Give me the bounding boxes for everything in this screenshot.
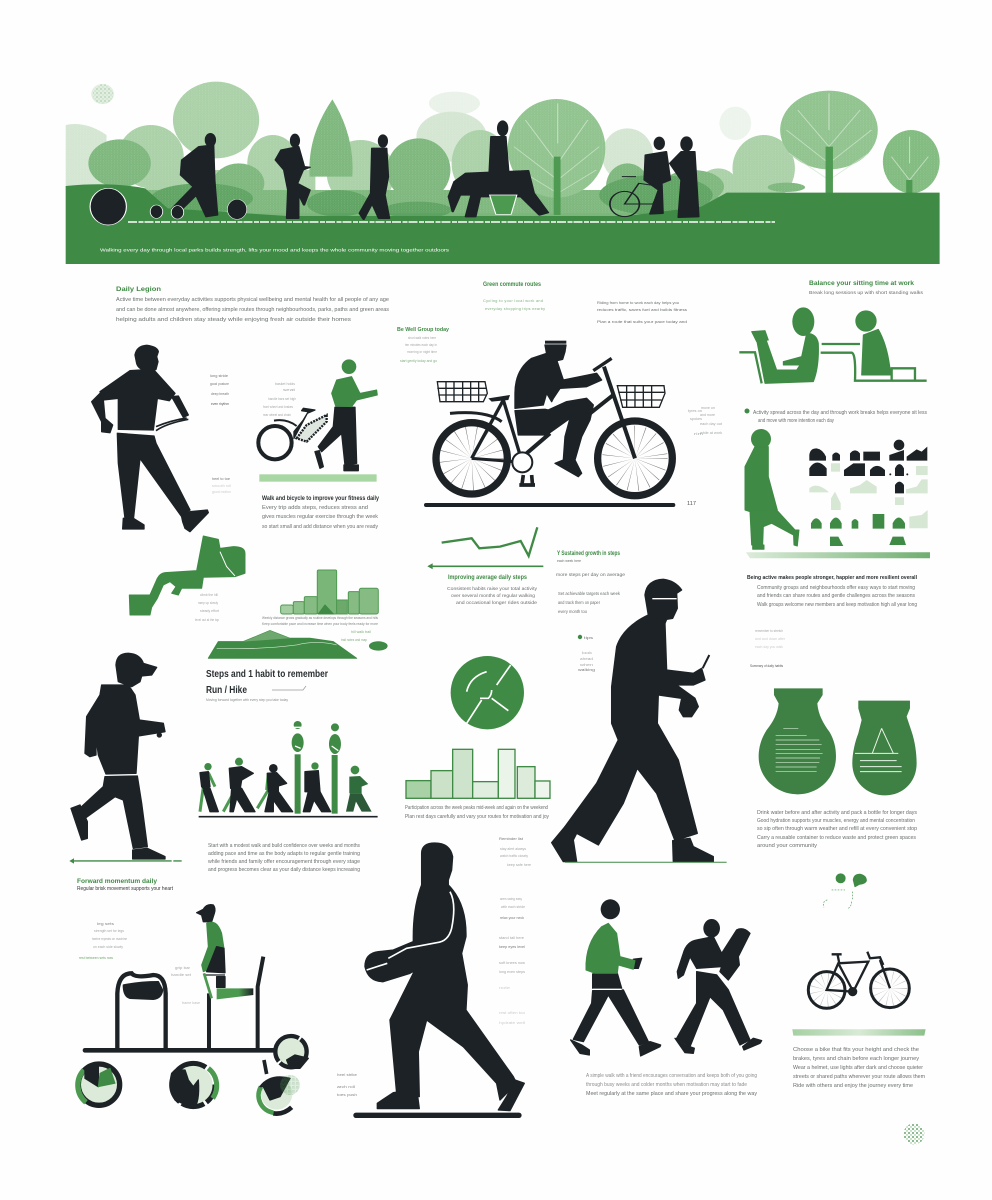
labels: tall walker notes: watch traffic closely xyxy=(500,854,528,858)
labels: small notes: Summary of daily habits xyxy=(750,664,783,668)
text block: trend side notes xyxy=(556,550,626,614)
text block: two walkers caption: Meet regularly at the same place and share your progress along the way xyxy=(586,1091,757,1097)
labels: machine notes: rest between sets now xyxy=(79,956,113,960)
labels: bars caption: trail notes and map xyxy=(341,638,367,642)
labels: walking man notes: long even steps xyxy=(499,970,525,974)
labels: small notes xyxy=(750,629,786,668)
labels: step map notes: steady effort xyxy=(200,609,220,613)
icon: speckled circle xyxy=(904,1124,924,1144)
text block: group caption: Start with a modest walk and build confidence over weeks and months xyxy=(208,843,360,849)
text block: trend side notes: each week here xyxy=(557,558,582,563)
icons: green vessels xyxy=(759,688,917,795)
text block: walker caption xyxy=(77,879,174,892)
text block: green route: Plan a route that suits your pace today and xyxy=(597,319,687,324)
labels: cyclist notes: spokes xyxy=(690,417,702,421)
text block: trend side notes: every month too xyxy=(558,609,587,614)
figure: two walkers xyxy=(571,899,762,1056)
labels: bicycle notes: basket holds xyxy=(275,382,295,386)
heading: group progress: Run / Hike xyxy=(206,685,247,696)
text block: green route: Riding from home to work each day helps you xyxy=(597,300,679,305)
labels: bars caption: Keep comfortable pace and increase time when your body feels ready for more xyxy=(262,622,378,626)
text block: small note: short walk notes here xyxy=(408,336,436,340)
text block: under bicycle: Walk and bicycle to improve your fitness daily xyxy=(262,496,380,502)
labels: bicycle notes: front wheel and brakes xyxy=(263,405,293,409)
figure: man standing with tool xyxy=(92,345,208,532)
labels: machine notes: strength set for legs xyxy=(94,929,124,933)
labels: small notes: and cool down after xyxy=(755,637,786,641)
labels: walking man notes: note xyxy=(499,986,510,990)
chart: exercise machine with ring charts xyxy=(78,905,308,1114)
labels: tall walker notes: tips xyxy=(584,636,593,640)
text block: small note: ten minutes each day in xyxy=(405,343,437,347)
text block: green route: Cycling to your local work and xyxy=(483,299,543,303)
text block: group caption: while at work xyxy=(700,431,722,435)
panel: park banner: Walking every day through local parks builds strength, lifts your mood and keeps the whole community moving together outdoors xyxy=(100,248,450,252)
text block: trend caption xyxy=(447,574,538,606)
text block: group caption: and progress becomes clear as your daily distance keeps increasing xyxy=(208,867,360,873)
labels: walking man notes: keep eyes level xyxy=(499,945,525,949)
labels: bicycle notes xyxy=(263,382,297,417)
labels: first figure notes: heel to toe xyxy=(212,477,230,481)
text block: bicycle caption: Choose a bike that fits your height and check the xyxy=(793,1047,919,1053)
text block: group caption: adding pace and time as the body adapts to regular gentle training xyxy=(208,851,360,857)
text block: pictogram caption: Community groups and neighbourhoods offer easy ways to start moving xyxy=(757,585,915,591)
figure: green man with small bicycle xyxy=(258,359,377,482)
labels: machine notes xyxy=(79,922,200,1005)
labels: tall walker notes: look xyxy=(582,651,592,655)
text block: bicycle caption: Ride with others and enjoy the journey every time xyxy=(793,1083,913,1089)
text block: two walkers caption: A simple walk with a friend encourages conversation and keeps both of you going xyxy=(586,1073,757,1079)
text block: two walkers caption xyxy=(586,1073,757,1097)
text block: bars caption xyxy=(405,805,549,820)
labels: bars caption xyxy=(262,616,378,642)
labels: bicycle notes: handle bars set high xyxy=(268,397,296,401)
figure: cyclist with baskets xyxy=(424,341,675,507)
text block: vessels caption: Good hydration supports your muscles, energy and mental concentration xyxy=(757,818,915,824)
labels: bars caption: Weekly distance grows gradually as routine develops through the seasons and hills xyxy=(262,616,378,620)
labels: first figure notes: deep breath xyxy=(211,392,229,396)
labels: first figure notes: smooth roll xyxy=(212,484,231,488)
labels: first figure notes xyxy=(210,374,231,494)
labels: first figure notes: good posture xyxy=(210,382,229,386)
text block: trend side notes: more steps per day on average xyxy=(556,572,626,577)
text block: group caption: and move with more intention each day xyxy=(758,418,834,424)
labels: cyclist notes: tyres on xyxy=(688,409,702,413)
text block: active at work: Break long sessions up with short standing walks xyxy=(809,290,924,296)
panel: park banner xyxy=(60,80,950,264)
text block: green route: reduces traffic, saves fuel and builds fitness xyxy=(597,307,687,312)
figure: walker with cap xyxy=(69,653,182,864)
labels: walking man notes: with each stride xyxy=(501,905,525,909)
text block: vessels caption: Drink water before and after activity and pack a bottle for longer days xyxy=(757,810,917,816)
labels: step map notes: level out at the top xyxy=(195,618,219,622)
figure: reader and seated person at table xyxy=(739,307,927,383)
labels: machine notes: on each side slowly xyxy=(93,945,123,949)
labels: walking man notes xyxy=(337,897,525,1097)
labels: walking man notes: arms swing easy xyxy=(500,897,522,901)
text block: pictogram caption xyxy=(747,575,917,608)
icon: green circle xyxy=(451,656,524,729)
text block: pictogram caption: and friends can share routes and gentle challenges across the seasons xyxy=(757,593,915,599)
text block: bicycle caption: streets or shared paths wherever your route allows them xyxy=(793,1074,925,1080)
text block: under bicycle xyxy=(262,496,380,530)
panel: intro text: Active time between everyday activities supports physical wellbeing and mental health for all people of any age xyxy=(116,297,389,303)
text block: group caption: each day out xyxy=(700,422,723,426)
text block: small note: start gently today and go xyxy=(400,359,437,363)
text block: vessels caption xyxy=(757,810,917,849)
text block: under bicycle: gives muscles regular exercise through the week xyxy=(262,514,378,520)
labels: walking man notes: heel strike xyxy=(337,1073,357,1077)
text block: trend caption: over several months of regular walking xyxy=(451,593,535,599)
labels: walking man notes: toes push xyxy=(337,1093,357,1097)
panel: intro text: Daily Legion xyxy=(116,286,161,293)
text block: bicycle caption: brakes, tyres and chain before each longer journey xyxy=(793,1056,919,1062)
text block: small note: Be Well Group today xyxy=(397,327,449,333)
text block: group caption xyxy=(207,843,360,873)
labels: machine notes: twelve repeats on machine xyxy=(92,937,127,941)
labels: first figure notes: even rhythm xyxy=(211,402,229,406)
labels: step map notes: climb the hill xyxy=(200,593,218,597)
text block: pictogram caption: Walk groups welcome new members and keep motivation high all year long xyxy=(757,602,917,608)
labels: tall walker notes: when xyxy=(580,663,593,667)
text block: trend side notes: Y Sustained growth in steps xyxy=(557,550,620,557)
text block: trend side notes: and track them on paper xyxy=(558,600,600,605)
text block: under bicycle: so start small and add distance when you are ready xyxy=(262,524,378,530)
panel: intro text: helping adults and children stay steady while enjoying fresh air outside their homes xyxy=(116,317,351,323)
text block: bars caption: Participation across the week peaks mid-week and again on the weekend xyxy=(405,805,548,811)
labels: walking man notes: stand tall here xyxy=(499,936,524,940)
panel: intro text: and can be done almost anywhere, offering simple routes through neighbourhoods, parks, paths and green areas xyxy=(116,307,389,313)
labels: machine notes: handle set xyxy=(171,973,192,977)
text block: green route: everyday shopping trips nearby xyxy=(485,307,545,311)
chart: pale green bars xyxy=(406,749,550,798)
chart: green walker and pictogram grid xyxy=(745,429,930,558)
icon: pale speckle xyxy=(93,84,113,104)
text block: vessels caption: Carry a reusable container to reduce waste and protect green spaces xyxy=(757,835,916,841)
text block: vessels caption: around your community xyxy=(757,843,817,849)
chart: group of figures with height columns xyxy=(199,721,378,817)
text block: group caption xyxy=(700,406,927,435)
text block: green route xyxy=(483,281,687,324)
labels: first figure notes: good motion xyxy=(212,490,231,494)
text block: vessels caption: so sip often through warm weather and refill at every convenient stop xyxy=(757,826,917,832)
text block: two walkers caption: through busy weeks and colder months when motivation may start to fade xyxy=(586,1082,747,1088)
text block: walker caption: Forward momentum daily xyxy=(77,879,158,885)
labels: step map notes xyxy=(195,593,220,622)
icon: road bicycle xyxy=(792,952,926,1036)
heading: group progress: Moving forward together with every step you take today xyxy=(206,698,288,702)
text block: under bicycle: Every trip adds steps, reduces stress and xyxy=(262,505,368,511)
text block: trend caption: Consistent habits raise your total activity xyxy=(447,586,538,592)
labels: small notes: remember to stretch xyxy=(755,629,783,633)
labels: cyclist notes: 117 xyxy=(687,501,696,507)
text block: bicycle caption xyxy=(793,1047,925,1089)
text block: trend caption: and occasional longer rides outside xyxy=(456,600,537,606)
heading: group progress xyxy=(206,669,328,702)
labels: first figure notes: long stride xyxy=(210,374,228,378)
labels: step map notes: ramp up slowly xyxy=(198,601,218,605)
text block: group caption: and more xyxy=(700,413,715,417)
text block: group caption: move on xyxy=(701,406,715,410)
labels: cyclist notes xyxy=(687,409,703,507)
icon: small green bubbles xyxy=(823,873,866,908)
text block: green route: Green commute routes xyxy=(483,281,541,288)
labels: tall walker notes xyxy=(499,635,595,867)
panel: intro text xyxy=(116,286,389,323)
labels: walking man notes: arch roll xyxy=(337,1085,355,1089)
labels: walking man notes: relax your neck xyxy=(500,916,524,920)
labels: tall walker notes: keep safe here xyxy=(507,863,531,867)
labels: walking man notes: rest often too xyxy=(499,1011,525,1015)
labels: tall walker notes: walking xyxy=(578,668,595,672)
text block: active at work: Balance your sitting time at work xyxy=(809,280,914,287)
figure: walking man with ball xyxy=(353,843,524,1118)
chart: green step map xyxy=(129,536,245,615)
labels: cyclist notes: rim xyxy=(694,432,703,436)
heading: group progress: Steps and 1 habit to remember xyxy=(206,669,328,680)
labels: machine notes: frame base xyxy=(182,1001,200,1005)
figure: tall walker with phone xyxy=(552,579,727,862)
text block: small note xyxy=(397,327,449,363)
labels: machine notes: grip bar xyxy=(175,966,191,970)
labels: bicycle notes: rear wheel and chain xyxy=(263,413,291,417)
text block: trend caption: Improving average daily steps xyxy=(448,574,527,581)
labels: tall walker notes: ahead xyxy=(580,657,593,661)
labels: bars caption: hill walk trail xyxy=(351,630,371,634)
text block: group caption: while friends and family offer encouragement through every stage xyxy=(207,859,360,865)
labels: tall walker notes: stay alert always xyxy=(500,847,526,851)
text block: trend side notes: Set achievable targets each week xyxy=(558,591,621,596)
labels: small notes: each day you walk xyxy=(755,645,783,649)
labels: walking man notes: hydrate well xyxy=(499,1021,525,1025)
text block: bars caption: Plan rest days carefully and vary your routes for motivation and joy xyxy=(405,814,549,820)
text block: active at work xyxy=(809,280,924,296)
labels: tall walker notes: Reminder list xyxy=(499,837,524,841)
text block: walker caption: Regular brisk movement supports your heart xyxy=(77,886,174,892)
labels: machine notes: leg sets xyxy=(97,922,114,926)
labels: bicycle notes: seat xyxy=(283,388,297,392)
text block: bicycle caption: Wear a helmet, use lights after dark and choose quieter xyxy=(793,1065,923,1071)
chart: green trend line xyxy=(427,527,543,569)
text block: group caption: Activity spread across the day and through work breaks helps everyone sit less xyxy=(753,410,927,416)
chart: stacked green bars and hills xyxy=(208,570,388,658)
labels: walking man notes: soft knees now xyxy=(499,961,525,965)
text block: pictogram caption: Being active makes people stronger, happier and more resilient overall xyxy=(747,575,917,581)
text block: small note: morning or night time xyxy=(407,350,437,354)
